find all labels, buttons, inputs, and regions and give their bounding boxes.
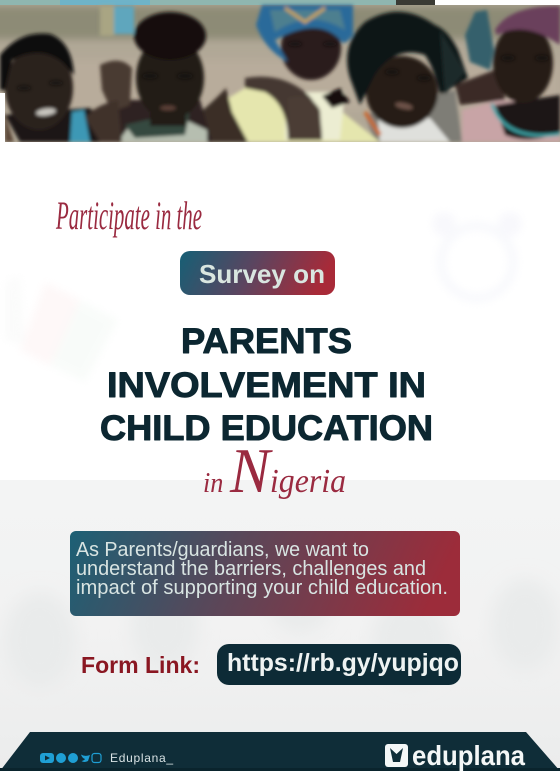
distant figure [465, 10, 494, 70]
form link label: Form Link: [81, 652, 200, 678]
hand on shoulder [312, 102, 322, 122]
description panel: understand the barriers, challenges and [76, 558, 426, 580]
white corner patch [435, 0, 560, 5]
description panel [70, 531, 460, 616]
title: CHILD EDUCATION [100, 409, 433, 448]
arm over kid2 [245, 77, 322, 140]
icon: faded book [5, 276, 118, 382]
kid1 body [5, 108, 115, 142]
kid1 head [5, 46, 73, 130]
form link button: https://rb.gy/yupjqo [227, 649, 459, 677]
badge: Survey on: Survey on [199, 259, 325, 289]
logo: eduplana: eduplana [412, 740, 525, 771]
badge: Survey on [180, 251, 335, 295]
description panel: As Parents/guardians, we want to [76, 539, 369, 561]
handle: Eduplana_ [110, 751, 173, 765]
kid2 head [133, 50, 207, 115]
kid4 head [366, 56, 438, 128]
kid3 head [281, 16, 341, 80]
kid5 head [493, 23, 553, 103]
kid5 body [462, 100, 560, 142]
script heading: Participate in the: Participate in the [55, 193, 202, 238]
photo: five children [0, 0, 560, 142]
description panel: impact of supporting your child education. [76, 577, 448, 599]
title: PARENTS [181, 322, 352, 361]
kid2 body [116, 97, 213, 142]
title [100, 322, 433, 448]
footer bar [0, 732, 560, 771]
kid3 body [225, 82, 380, 142]
background panel: faded children photo [0, 480, 560, 771]
social icons [40, 753, 101, 763]
form link button [217, 644, 461, 685]
kid4 body [365, 90, 462, 142]
icon: faded alarm clock [432, 212, 522, 298]
title: INVOLVEMENT IN [107, 366, 426, 405]
script heading: in Nigeria: in Nigeria [203, 435, 346, 506]
